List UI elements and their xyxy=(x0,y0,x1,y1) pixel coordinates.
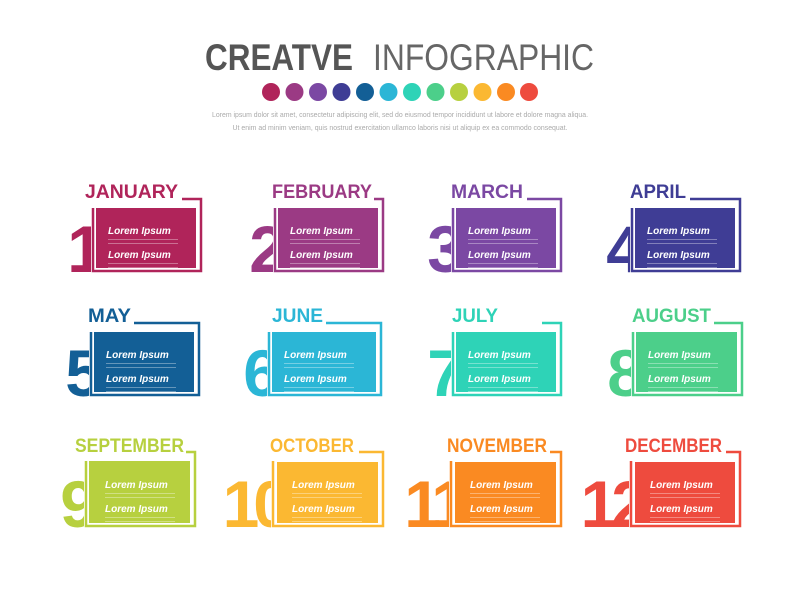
card: October: OCTOBER xyxy=(270,436,354,457)
card: February: FEBRUARY xyxy=(272,182,372,203)
title: CREATVE xyxy=(205,37,353,78)
card: May: 5 xyxy=(65,336,102,410)
card: August xyxy=(607,306,746,410)
card: July: JULY xyxy=(452,306,498,327)
card: February: 2 xyxy=(249,212,286,286)
card: July: 7 xyxy=(427,336,464,410)
card: November xyxy=(404,436,564,541)
card: March: MARCH xyxy=(451,182,523,203)
card: June xyxy=(243,306,385,410)
card: September xyxy=(60,436,199,541)
card: April: APRIL xyxy=(630,182,686,203)
card: March xyxy=(427,182,566,286)
card: November: 11 xyxy=(404,467,466,541)
card: March: 3 xyxy=(427,212,464,286)
card: July xyxy=(427,306,566,410)
subtitle: Ut enim ad minim veniam, quis nostrud exercitation ullamco laboris nisi ut aliquip ex ea commodo consequat. xyxy=(232,123,568,132)
card: January: JANUARY xyxy=(85,182,178,203)
card: November: NOVEMBER xyxy=(447,436,547,457)
color dots xyxy=(262,83,538,101)
card: August: 8 xyxy=(607,336,644,410)
subtitle xyxy=(212,110,588,132)
subtitle: Lorem ipsum dolor sit amet, consectetur adipiscing elit, sed do eiusmod tempor incididunt ut labore et dolore magna aliqua. xyxy=(212,110,588,119)
card: September: SEPTEMBER xyxy=(75,436,184,457)
card: April xyxy=(606,182,745,286)
card: January xyxy=(67,182,206,286)
card: June: 6 xyxy=(243,336,280,410)
card: September: 9 xyxy=(60,467,97,541)
card: December: DECEMBER xyxy=(625,436,722,457)
title: INFOGRAPHIC xyxy=(373,37,594,78)
card: December: 12 xyxy=(581,467,646,541)
card: April: 4 xyxy=(606,212,643,286)
card: October: 10 xyxy=(223,467,287,541)
card: June: JUNE xyxy=(272,306,323,327)
card: May xyxy=(65,306,204,410)
card: May: MAY xyxy=(88,306,131,327)
card: August: AUGUST xyxy=(632,306,711,327)
card: December xyxy=(581,436,744,541)
title xyxy=(205,37,594,78)
card: October xyxy=(223,436,386,541)
card: February xyxy=(249,182,388,286)
card: January: 1 xyxy=(67,212,104,286)
